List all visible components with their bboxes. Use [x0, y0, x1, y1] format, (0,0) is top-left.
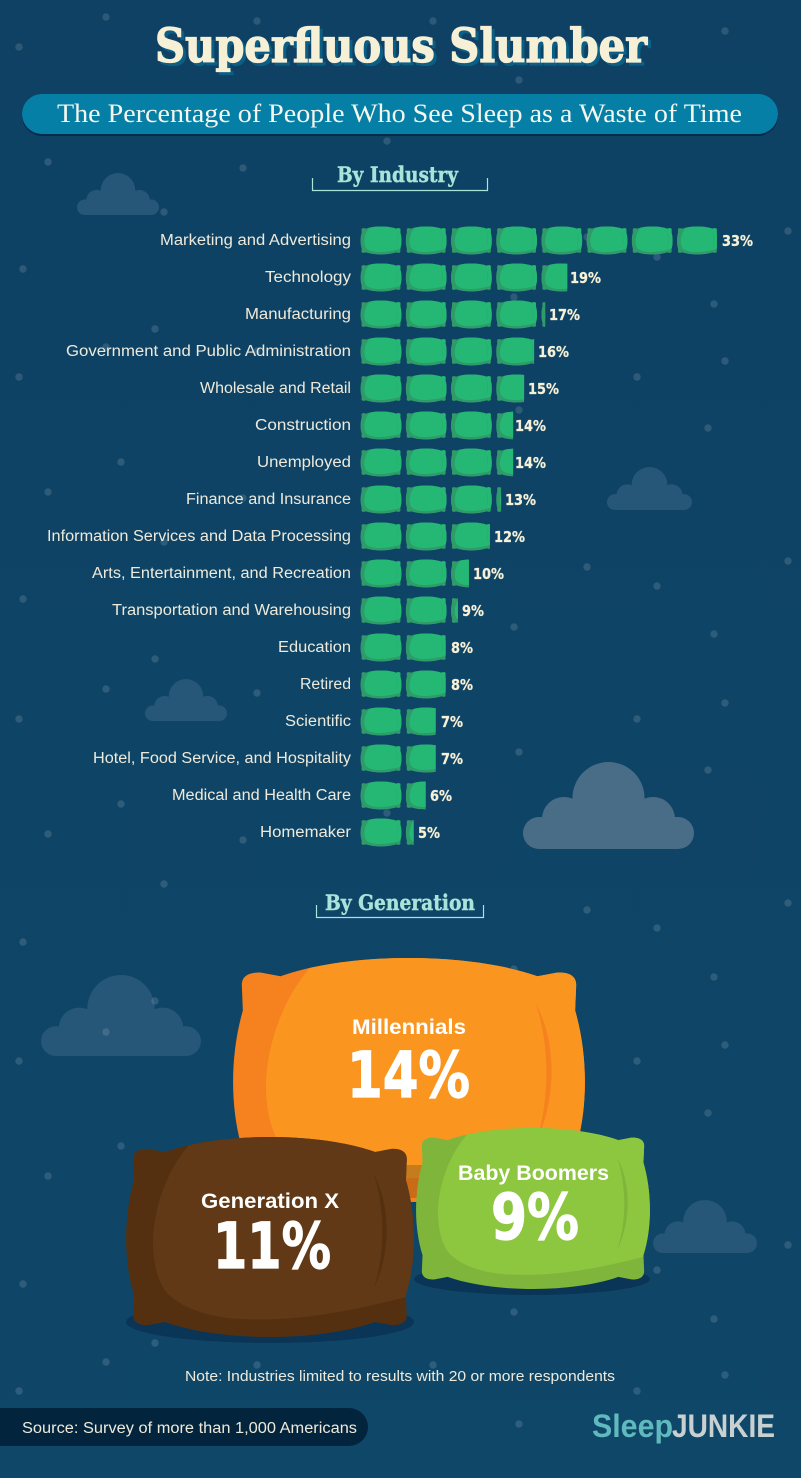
row: Government and Public Administration 16% [66, 336, 569, 366]
row: Marketing and Advertising 33% [160, 225, 753, 254]
row: Government and Public Administration 16%: 16% [538, 343, 569, 361]
pillow: generation x: Generation X [201, 1190, 339, 1213]
row: Retired 8% [300, 669, 473, 698]
pillow: millennials: 14% [347, 1039, 470, 1112]
row: Finance and Insurance 13%: Finance and Insurance [186, 491, 351, 508]
row: Education 8%: Education [278, 639, 351, 656]
row: Wholesale and Retail 15%: Wholesale and Retail [200, 380, 351, 397]
subtitle banner [22, 94, 778, 136]
heading: by generation: By Generation [325, 890, 475, 915]
cloud: right lower [653, 1200, 757, 1253]
row: Technology 19%: Technology [265, 269, 351, 286]
row: Transportation and Warehousing 9% [112, 595, 494, 624]
row: Hotel, Food Service, and Hospitality 7%: Hotel, Food Service, and Hospitality [93, 750, 351, 767]
row: Information Services and Data Processing 12% [47, 521, 525, 550]
row: Arts, Entertainment, and Recreation 10%: 10% [473, 565, 504, 583]
bar chart: by industry [47, 225, 753, 847]
subtitle banner: The Percentage of People Who See Sleep as a Waste of Time [57, 99, 742, 128]
row: Medical and Health Care 6% [172, 780, 452, 810]
row: Medical and Health Care 6%: 6% [430, 787, 452, 805]
row: Technology 19%: 19% [570, 269, 601, 287]
row: Unemployed 14% [257, 447, 546, 476]
pillow: millennials: Millennials [352, 1016, 466, 1039]
row: Scientific 7%: Scientific [285, 713, 351, 730]
heading: by industry: By Industry [337, 162, 459, 187]
row: Education 8%: 8% [451, 639, 473, 657]
row: Information Services and Data Processing 12%: Information Services and Data Processing [47, 528, 351, 545]
row: Arts, Entertainment, and Recreation 10% [92, 558, 504, 588]
pillow: generation x: 11% [213, 1210, 331, 1283]
cloud: large [523, 762, 694, 849]
logo: sleepjunkie: Sleep [592, 1408, 673, 1444]
cloud: right middle [607, 467, 692, 510]
cloud: left middle [145, 679, 227, 721]
row: Information Services and Data Processing 12%: 12% [494, 528, 525, 546]
row: Hotel, Food Service, and Hospitality 7% [93, 743, 463, 772]
row: Homemaker 5%: Homemaker [260, 824, 351, 841]
row: Retired 8%: Retired [300, 676, 351, 693]
row: Wholesale and Retail 15% [200, 373, 559, 402]
row: Transportation and Warehousing 9%: Transportation and Warehousing [112, 602, 351, 619]
source pill [0, 1408, 368, 1446]
pillow: baby boomers: 9% [491, 1181, 579, 1254]
row: Unemployed 14%: 14% [515, 454, 546, 472]
note: Note: Industries limited to results with 20 or more respondents [185, 1369, 615, 1385]
pillow: baby boomers: Baby Boomers [458, 1162, 609, 1185]
row: Wholesale and Retail 15%: 15% [528, 380, 559, 398]
row: Technology 19% [265, 262, 601, 292]
row: Unemployed 14%: Unemployed [257, 454, 351, 471]
row: Hotel, Food Service, and Hospitality 7%: 7% [441, 750, 463, 768]
cloud: left lower [41, 975, 201, 1056]
heading: by industry [312, 162, 488, 190]
cloud: top left [77, 173, 159, 215]
row: Arts, Entertainment, and Recreation 10%: Arts, Entertainment, and Recreation [92, 565, 351, 582]
row: Manufacturing 17%: Manufacturing [245, 306, 351, 323]
row: Homemaker 5% [260, 817, 449, 846]
title: Superfluous Slumber [158, 22, 651, 77]
row: Scientific 7%: 7% [441, 713, 463, 731]
row: Finance and Insurance 13% [186, 484, 539, 514]
logo: sleepjunkie: JUNKIE [672, 1408, 775, 1444]
row: Homemaker 5%: 5% [418, 824, 440, 842]
row: Retired 8%: 8% [451, 676, 473, 694]
row: Construction 14%: 14% [515, 417, 546, 435]
row: Manufacturing 17%: 17% [549, 306, 580, 324]
pillow: generation x [126, 1127, 428, 1343]
source pill: Source: Survey of more than 1,000 Americans [22, 1420, 357, 1437]
row: Construction 14%: Construction [255, 417, 351, 434]
row: Construction 14% [255, 410, 546, 440]
row: Manufacturing 17% [245, 299, 584, 328]
row: Medical and Health Care 6%: Medical and Health Care [172, 787, 351, 804]
row: Marketing and Advertising 33%: 33% [722, 232, 753, 250]
row: Government and Public Administration 16%: Government and Public Administration [66, 343, 351, 360]
title: Superfluous Slumber [155, 19, 648, 74]
row: Marketing and Advertising 33%: Marketing and Advertising [160, 232, 351, 249]
pillow: millennials [233, 946, 603, 1202]
logo: sleepjunkie [592, 1408, 775, 1444]
row: Education 8% [278, 632, 473, 662]
row: Finance and Insurance 13%: 13% [505, 491, 536, 509]
pillow: baby boomers [414, 1120, 662, 1295]
row: Transportation and Warehousing 9%: 9% [462, 602, 484, 620]
row: Scientific 7% [285, 706, 463, 736]
